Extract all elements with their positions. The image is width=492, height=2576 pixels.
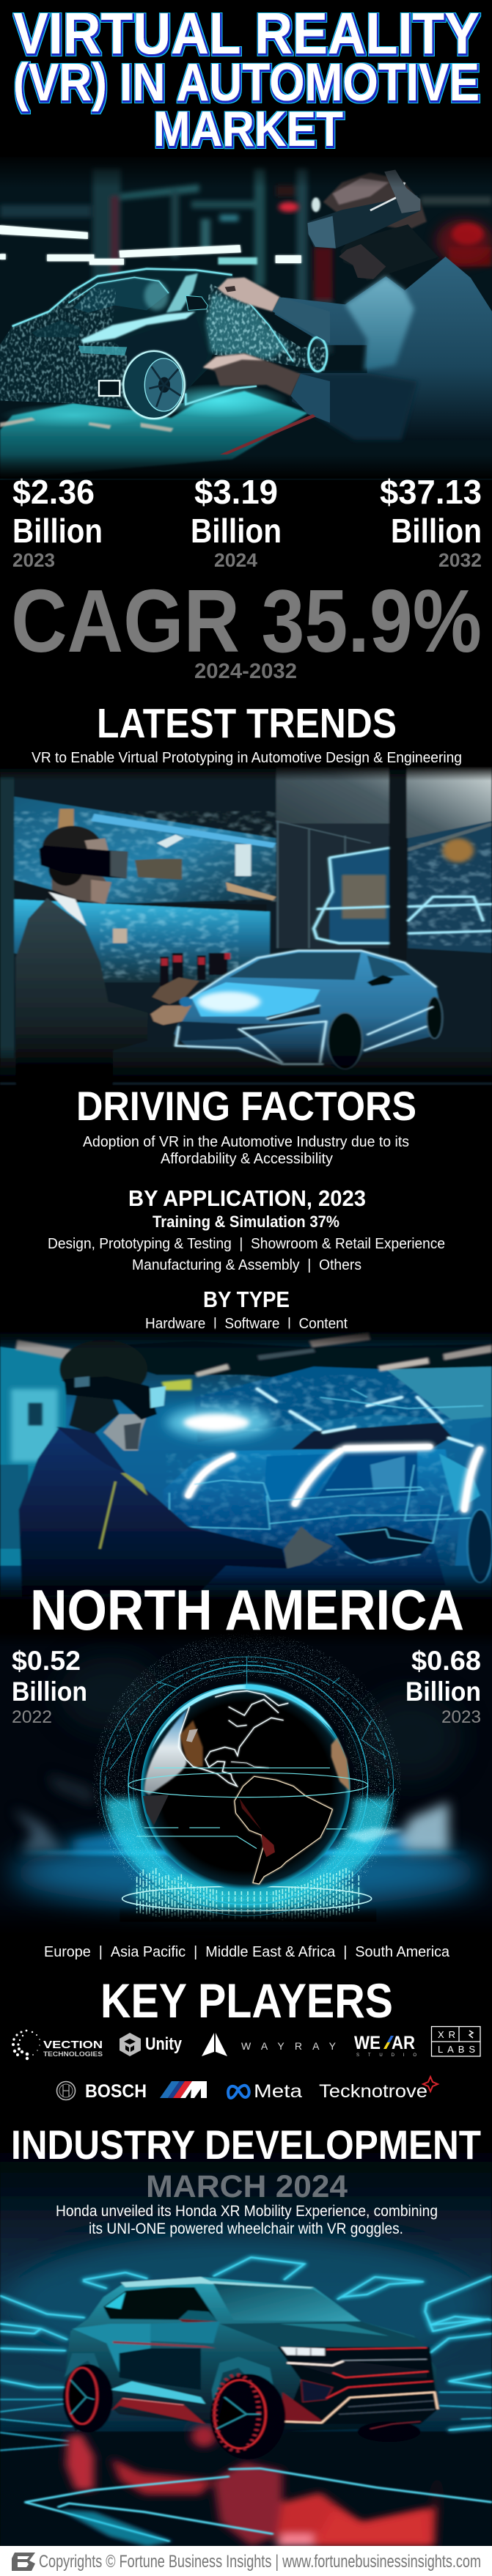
- title: MARKET: [153, 101, 343, 157]
- person: [274, 170, 492, 440]
- text: Honda development description: [56, 2203, 438, 2237]
- stat: 2023 market size: $2.36: [12, 473, 95, 511]
- stat: North America 2023: $0.68: [411, 1646, 481, 1676]
- stat: 2024 market size: 2024: [214, 549, 258, 571]
- stat: 2023 market size: 2023: [12, 549, 55, 571]
- logo: Bosch: [57, 2081, 147, 2102]
- logo: Unity: [120, 2033, 183, 2056]
- data streaks: [137, 1868, 359, 1921]
- segment: by type: Hardware | Software | Content: [145, 1315, 348, 1332]
- sphere: [141, 1684, 350, 1889]
- stat: 2024 market size: [191, 473, 282, 571]
- text: other regions: Europe | Asia Pacific | Middle East & Africa | South America: [44, 1943, 450, 1960]
- logo: WE/AR Studio: AR: [392, 2033, 415, 2053]
- stat: North America 2022: $0.52: [12, 1646, 81, 1676]
- stat: 2032 market size: 2032: [438, 549, 482, 571]
- lower ring glow: [105, 1798, 391, 1908]
- stat: 2024 market size: $3.19: [194, 473, 278, 511]
- image: technician with blue holographic car: [0, 1328, 492, 1618]
- equator bands: [128, 1768, 368, 1849]
- stat: 2032 market size: Billion: [391, 512, 482, 550]
- logo: WayRay: WAYRAY: [241, 2040, 337, 2052]
- logo: Vection Technologies: VECTION: [43, 2039, 103, 2051]
- segment: by application: Manufacturing & Assembly | Others: [132, 1256, 361, 1273]
- CAGR figure: 2024-2032: [194, 660, 297, 683]
- car: [174, 951, 442, 1070]
- segment: by application: Design, Prototyping & Testing | Showroom & Retail Experience: [48, 1235, 445, 1252]
- segment: by application: [48, 1185, 445, 1273]
- SUV body: [66, 2277, 438, 2436]
- logo: XR Labs: LABS: [438, 2044, 475, 2055]
- man: [19, 1427, 287, 1597]
- logo: Tecknotrove: [319, 2077, 438, 2102]
- stat: North America 2022: Billion: [12, 1677, 87, 1707]
- heading: key players: KEY PLAYERS: [100, 1973, 393, 2028]
- date: March 2024: MARCH 2024: [146, 2169, 348, 2204]
- man: [15, 898, 147, 1085]
- segment: by type: [145, 1287, 348, 1332]
- logo: WE/AR Studio: WE: [354, 2033, 381, 2053]
- image: glowing globe of the Americas: [0, 1632, 492, 1935]
- logo: BMW M: [160, 2081, 207, 2098]
- stat: 2023 market size: [12, 473, 103, 571]
- stat: North America 2023: Billion: [405, 1677, 481, 1707]
- network rings: [90, 1633, 403, 1901]
- logo: XR Labs: XR: [438, 2029, 455, 2040]
- stat: 2023 market size: Billion: [12, 512, 103, 550]
- text: latest trend description: VR to Enable Virtual Prototyping in Automotive Design & Engineering: [32, 750, 462, 766]
- heading: latest trends: LATEST TRENDS: [97, 700, 397, 747]
- stat: North America 2023: 2023: [441, 1707, 481, 1727]
- logo: WE/AR Studio: STUDIO: [356, 2053, 416, 2058]
- stat: North America 2022: [12, 1646, 87, 1727]
- stat: 2032 market size: $37.13: [380, 473, 482, 511]
- image: man in suit with holographic showroom car: [0, 766, 492, 1085]
- logo: Vection Technologies: TECHNOLOGIES: [43, 2050, 103, 2058]
- logo: Bosch: BOSCH: [85, 2081, 147, 2102]
- stat: North America 2022: 2022: [12, 1707, 52, 1727]
- South America outline: [235, 1776, 332, 1884]
- logo: Tecknotrove: Tecknotrove: [319, 2081, 427, 2102]
- stat: North America 2023: [405, 1646, 481, 1727]
- stat: 2024 market size: Billion: [191, 512, 282, 550]
- segment: by type: BY TYPE: [203, 1287, 290, 1312]
- logo: Meta: Meta: [254, 2081, 302, 2102]
- logo: WE/AR Studio: [354, 2033, 416, 2058]
- text: driving factors description: Adoption of VR in the Automotive Industry due to its: [83, 1134, 409, 1150]
- text: Honda development description: its UNI-ONE powered wheelchair with VR goggles.: [89, 2220, 403, 2237]
- heading: driving factors: DRIVING FACTORS: [76, 1083, 416, 1129]
- logo: WayRay: [202, 2033, 337, 2056]
- hero image: man in VR headset with holographic car: [0, 152, 492, 479]
- icon: Fortune Business Insights logo: [12, 2553, 35, 2571]
- segment: by application: Training & Simulation 37%: [153, 1212, 339, 1231]
- logo: Unity: Unity: [145, 2034, 183, 2054]
- stat: 2032 market size: [380, 473, 482, 571]
- title: [13, 1, 480, 157]
- segment: by application: BY APPLICATION, 2023: [128, 1185, 366, 1211]
- logo: XR Labs: [431, 2026, 480, 2056]
- North America outline: [178, 1691, 288, 1786]
- text: driving factors description: Affordability & Accessibility: [161, 1151, 333, 1167]
- logo: Meta: [228, 2081, 302, 2102]
- holographic car: [0, 269, 330, 479]
- text: Honda development description: Honda unveiled its Honda XR Mobility Experience, combining: [56, 2203, 438, 2220]
- image: neon SUV with red reflections: [0, 2141, 492, 2546]
- logo: Vection Technologies: [12, 2030, 103, 2060]
- text: driving factors description: [83, 1134, 409, 1167]
- footer: [0, 2546, 492, 2576]
